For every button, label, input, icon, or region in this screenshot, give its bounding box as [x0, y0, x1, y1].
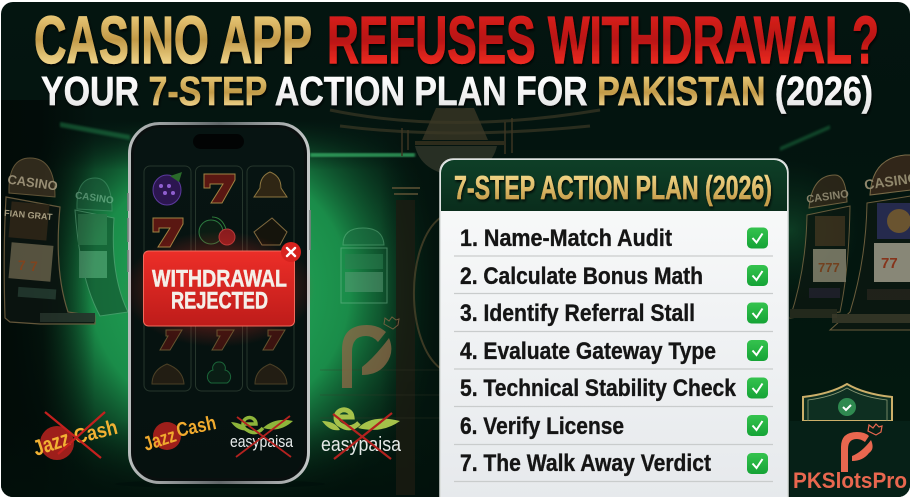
popup: withdrawal rejected: WITHDRAWAL [152, 266, 287, 292]
step 6: 6. Verify License [460, 413, 624, 440]
slot machine right [790, 175, 850, 318]
icon: JazzCash logo in phone: Jazz [141, 425, 179, 456]
phone frame [130, 124, 308, 482]
icon: crossed out JazzCash logo: Cash [72, 416, 120, 449]
watermark: P logo [342, 317, 399, 388]
icon: close button [281, 242, 301, 262]
icon: crossed out JazzCash logo [30, 412, 120, 461]
row dividers [454, 256, 773, 482]
slot reels [144, 166, 294, 391]
step 2: 2. Calculate Bonus Math [460, 263, 703, 290]
side buttons [128, 193, 310, 272]
camera notch [193, 134, 244, 149]
subtitle: YOUR 7-STEP ACTION PLAN FOR PAKISTAN (2026) [41, 68, 873, 114]
slot machine right: 777 [818, 260, 840, 275]
icon: crossed out easypaisa logo in phone: easypaisa [230, 432, 293, 451]
slot machine far left: CASINO [7, 172, 59, 193]
floor reflections [320, 370, 440, 418]
slot machine far left [4, 158, 95, 324]
step 4: 4. Evaluate Gateway Type [460, 338, 716, 365]
ceiling glow strip [60, 122, 130, 140]
slot machine far left: FIAN GRAT [4, 208, 53, 222]
step 6 [460, 413, 768, 440]
step 5: 5. Technical Stability Check [460, 375, 737, 402]
ceiling moulding [330, 110, 600, 133]
icon: JazzCash logo in phone: Cash [174, 412, 218, 442]
slot machine right: CASINO [806, 188, 850, 206]
title: casino app: CASINO APP [34, 3, 312, 78]
symbol: cherry [199, 217, 235, 245]
symbol: seven [153, 218, 183, 247]
slot machine left, green tint: CASINO [74, 190, 115, 207]
step 1: 1. Name-Match Audit [460, 225, 672, 252]
column and arch behind list panel [392, 188, 440, 495]
slot machine far left: 7 [18, 257, 26, 273]
icon: verified shield [803, 384, 892, 421]
symbol: gem [254, 218, 287, 245]
icon: JazzCash logo in phone [144, 416, 216, 450]
slot machine far left: 7 [30, 258, 38, 274]
panel body [440, 159, 788, 499]
icon: crossed out easypaisa logo [321, 410, 402, 459]
popup: withdrawal rejected: REJECTED [171, 288, 268, 314]
step 7: 7. The Walk Away Verdict [460, 450, 711, 477]
step 3: 3. Identify Referral Stall [460, 300, 695, 327]
slot machine far right: 77 [881, 255, 898, 272]
symbol: bell [254, 172, 287, 197]
title line 1 [35, 15, 878, 66]
symbol: seven [204, 174, 235, 203]
symbol: grapes [153, 172, 182, 205]
phone screen [134, 128, 304, 478]
icon: crossed out JazzCash logo: Jazz [30, 426, 73, 461]
popup: withdrawal rejected [144, 251, 294, 326]
popup glow [130, 234, 308, 344]
panel heading: 7-STEP ACTION PLAN (2026) [454, 169, 772, 206]
brand: PKSlotsPro logo [790, 421, 911, 499]
brand: PKSlotsPro logo: PKSlotsPro [793, 468, 907, 493]
lower symbols [152, 330, 287, 384]
chandelier [402, 108, 512, 176]
slot machine far right [830, 155, 911, 330]
panel: 7-step action plan [440, 159, 788, 499]
slot machine left, green tint [74, 178, 128, 316]
phone shadow [115, 480, 325, 488]
icon: crossed out easypaisa logo in phone [230, 416, 293, 457]
phone [127, 122, 311, 484]
slot machine mid, behind phone [341, 228, 387, 303]
icon: crossed out easypaisa logo: easypaisa [321, 434, 402, 456]
panel header [441, 160, 787, 211]
